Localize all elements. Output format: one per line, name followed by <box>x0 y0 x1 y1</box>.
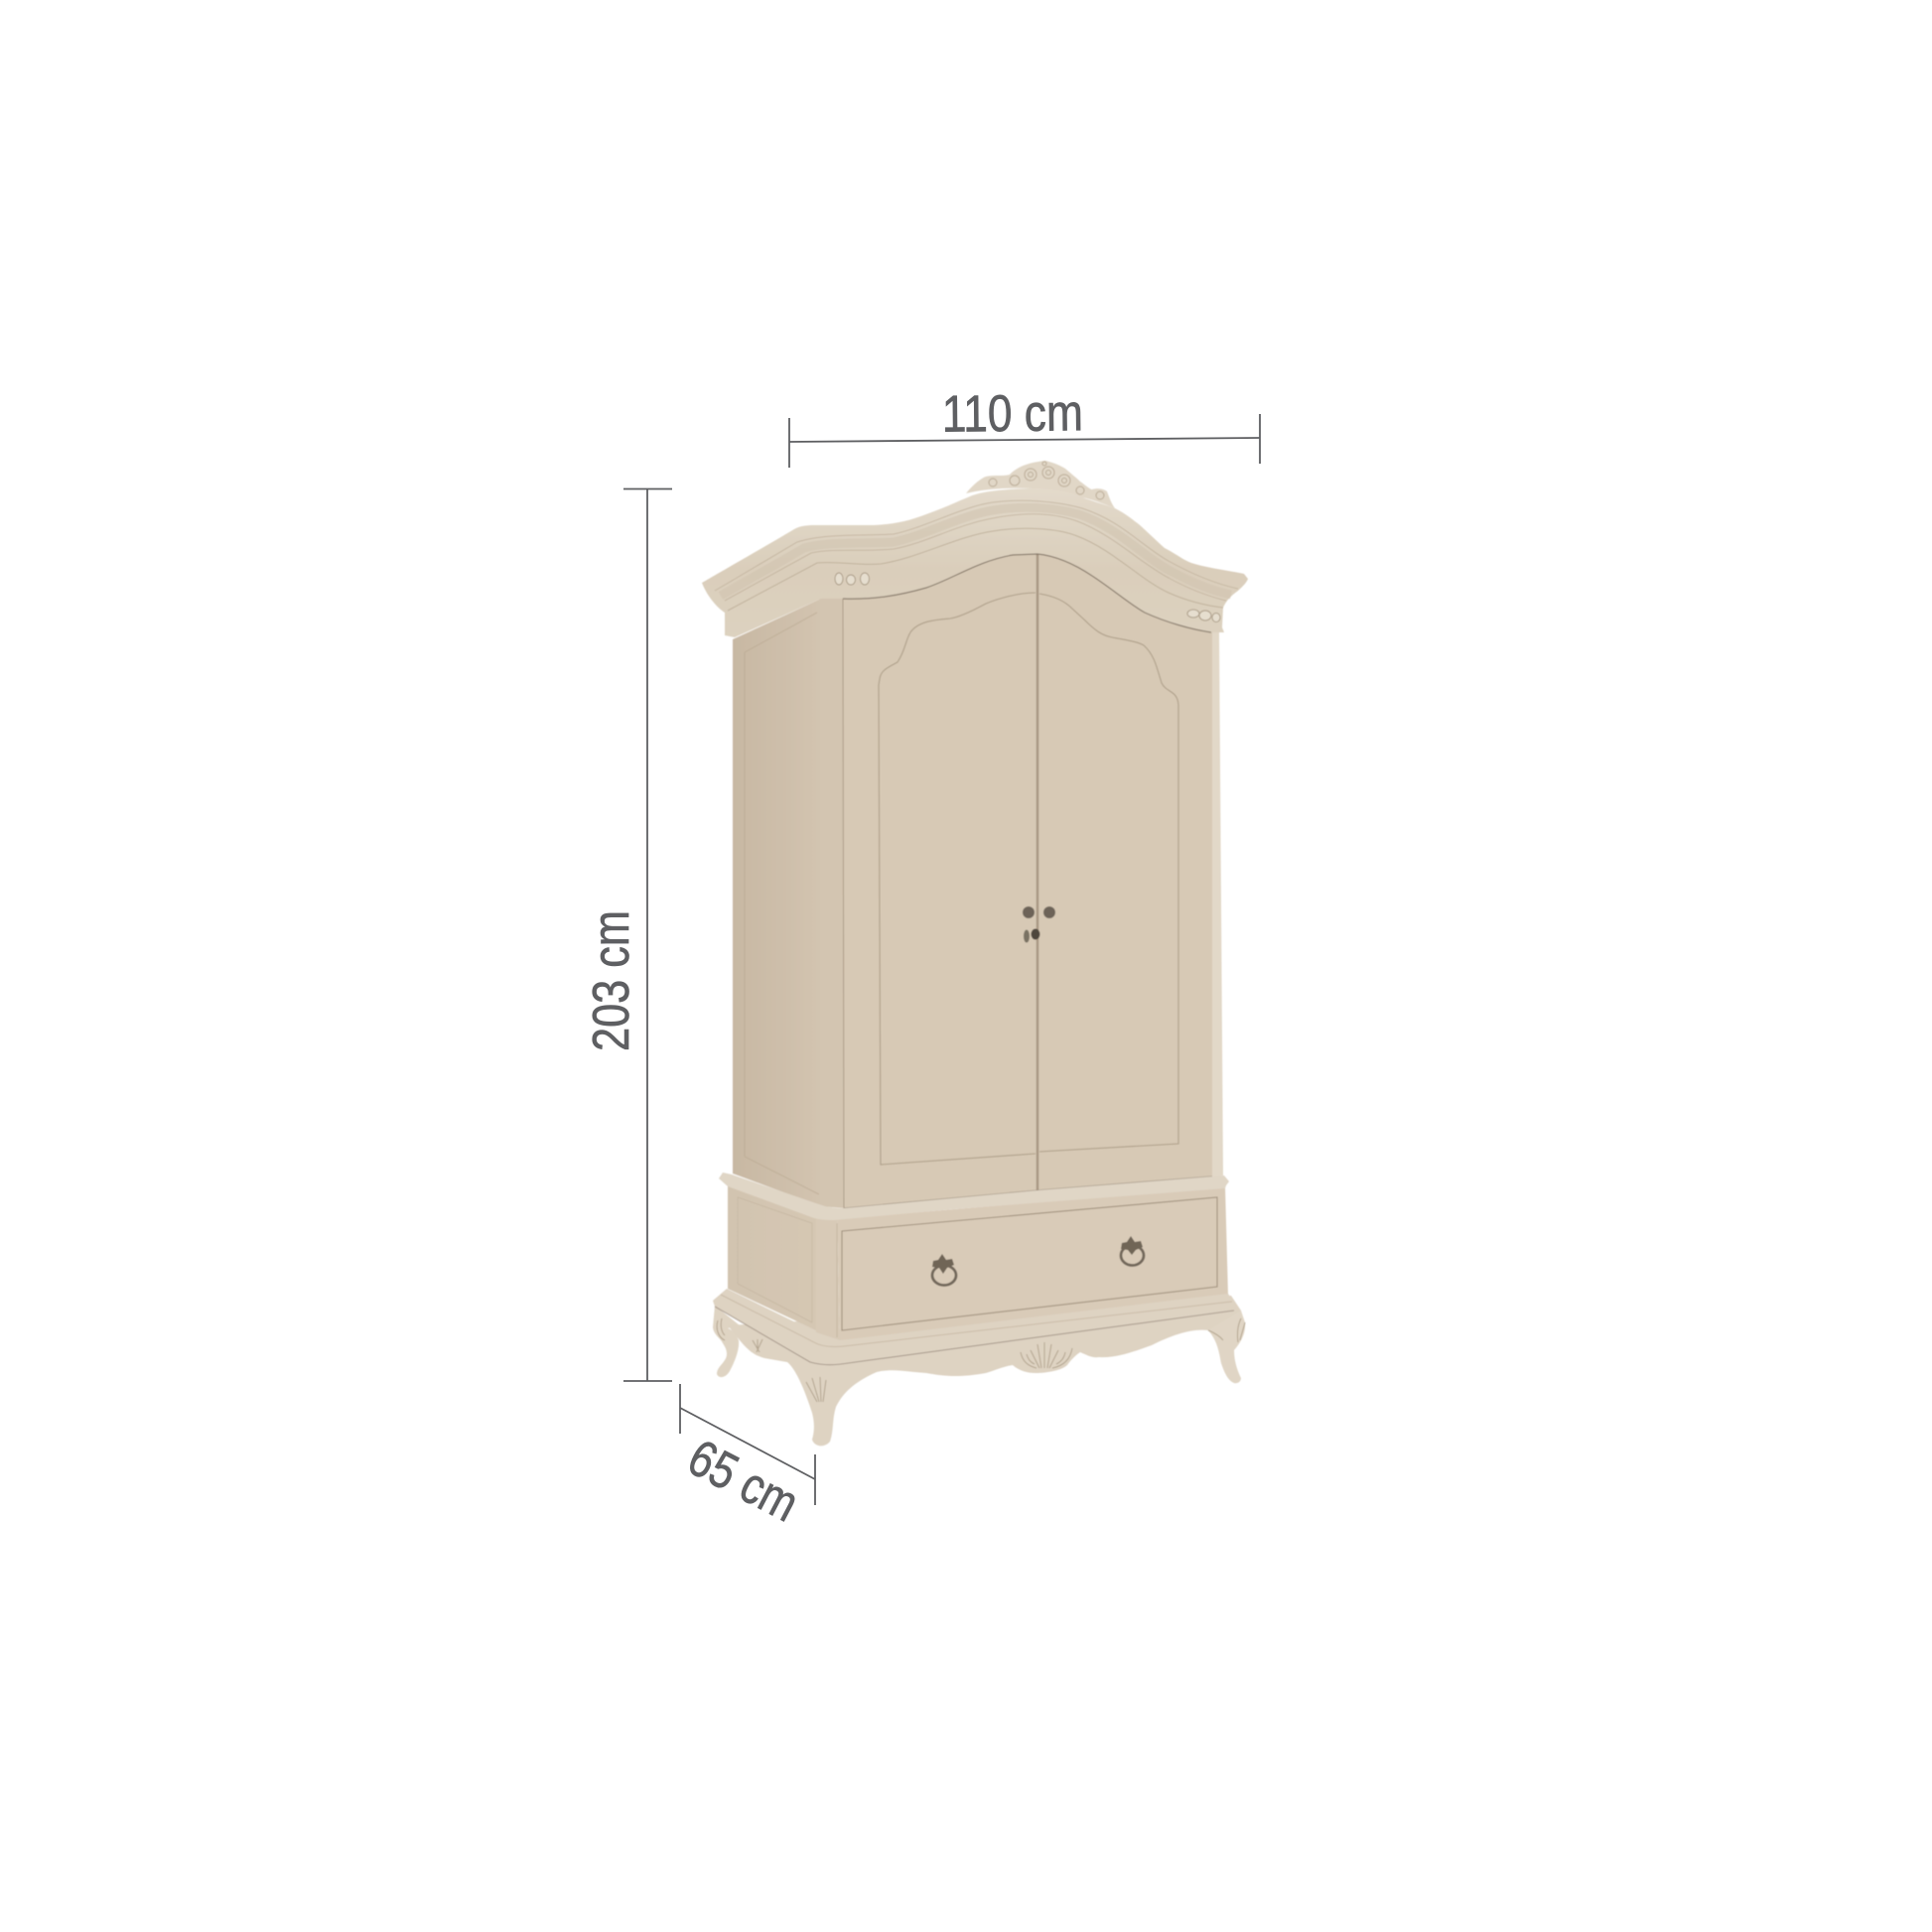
crest carving <box>966 461 1115 508</box>
left door <box>843 554 1038 1208</box>
door gap <box>1036 554 1038 1190</box>
side panel moulding <box>745 613 819 1194</box>
front-right leg <box>1191 1311 1245 1383</box>
lower side moulding <box>738 1197 812 1322</box>
corner strip <box>819 599 845 1208</box>
lower case side <box>728 1181 816 1330</box>
drawer handle left <box>932 1254 956 1285</box>
cornice carvings <box>835 573 1220 621</box>
door left edge <box>843 599 844 1208</box>
right edge strip <box>1211 632 1223 1177</box>
lower case front <box>837 1186 1228 1340</box>
dimension: depth <box>679 1384 815 1533</box>
cornice <box>702 488 1248 637</box>
drawer <box>837 1197 1217 1337</box>
right door panel moulding <box>1039 594 1178 1152</box>
base moulding of upper case <box>719 1173 1229 1220</box>
dimension: width <box>789 384 1260 468</box>
plinth lines <box>715 1295 1234 1365</box>
width lines <box>789 414 1260 468</box>
door knobs and key <box>1023 906 1055 943</box>
plinth moulding <box>713 1289 1236 1365</box>
height label: 203 cm <box>583 910 640 1051</box>
cornice moulding bands <box>715 500 1238 611</box>
apron and corner leg <box>728 1296 1241 1446</box>
lower case corner <box>816 1216 840 1340</box>
right door <box>1037 554 1212 1190</box>
upper case side panel <box>733 599 821 1206</box>
depth label: 65 cm <box>679 1429 807 1533</box>
left door panel moulding <box>879 593 1035 1165</box>
back-left leg <box>713 1306 740 1377</box>
apron carvings <box>717 1318 1245 1402</box>
height lines <box>623 488 672 1381</box>
wardrobe illustration <box>702 461 1248 1446</box>
depth lines <box>680 1384 815 1505</box>
width label: 110 cm <box>942 384 1083 444</box>
door top edge shadow <box>843 554 1211 632</box>
door bottom edge <box>844 1176 1212 1208</box>
drawer handle right <box>1121 1236 1144 1265</box>
